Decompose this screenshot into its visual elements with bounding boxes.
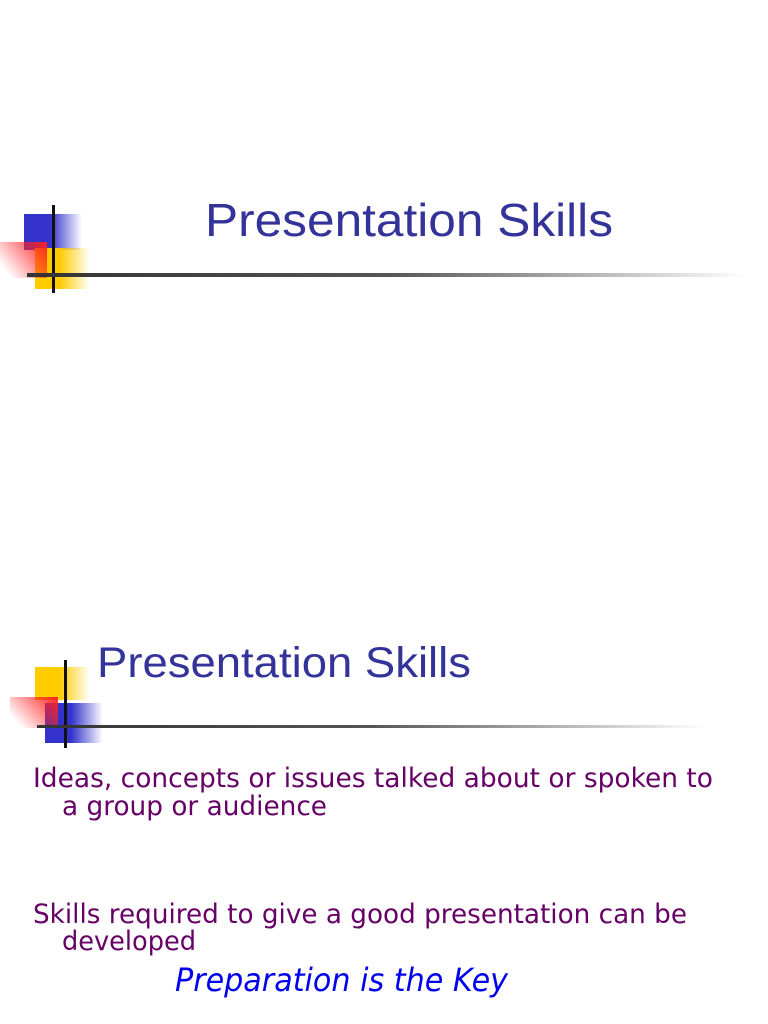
divider line slide 2 — [37, 725, 707, 728]
callout: preparation is the key: Preparation is the Key — [175, 961, 509, 999]
text block: definition: a group or audience — [62, 791, 327, 822]
text block: skills — [33, 899, 687, 957]
icon: slide 1 decorative squares — [0, 205, 90, 293]
divider line slide 1 — [27, 273, 747, 277]
text block: definition — [33, 763, 713, 822]
icon: slide 2 decorative squares — [10, 660, 103, 748]
text block: definition: Ideas, concepts or issues talked about or spoken to — [33, 763, 713, 794]
title slide 1: Presentation Skills — [205, 194, 613, 246]
text block: skills: Skills required to give a good presentation can be — [33, 899, 687, 930]
title slide 2: Presentation Skills — [97, 639, 471, 687]
text block: skills: developed — [62, 926, 196, 957]
